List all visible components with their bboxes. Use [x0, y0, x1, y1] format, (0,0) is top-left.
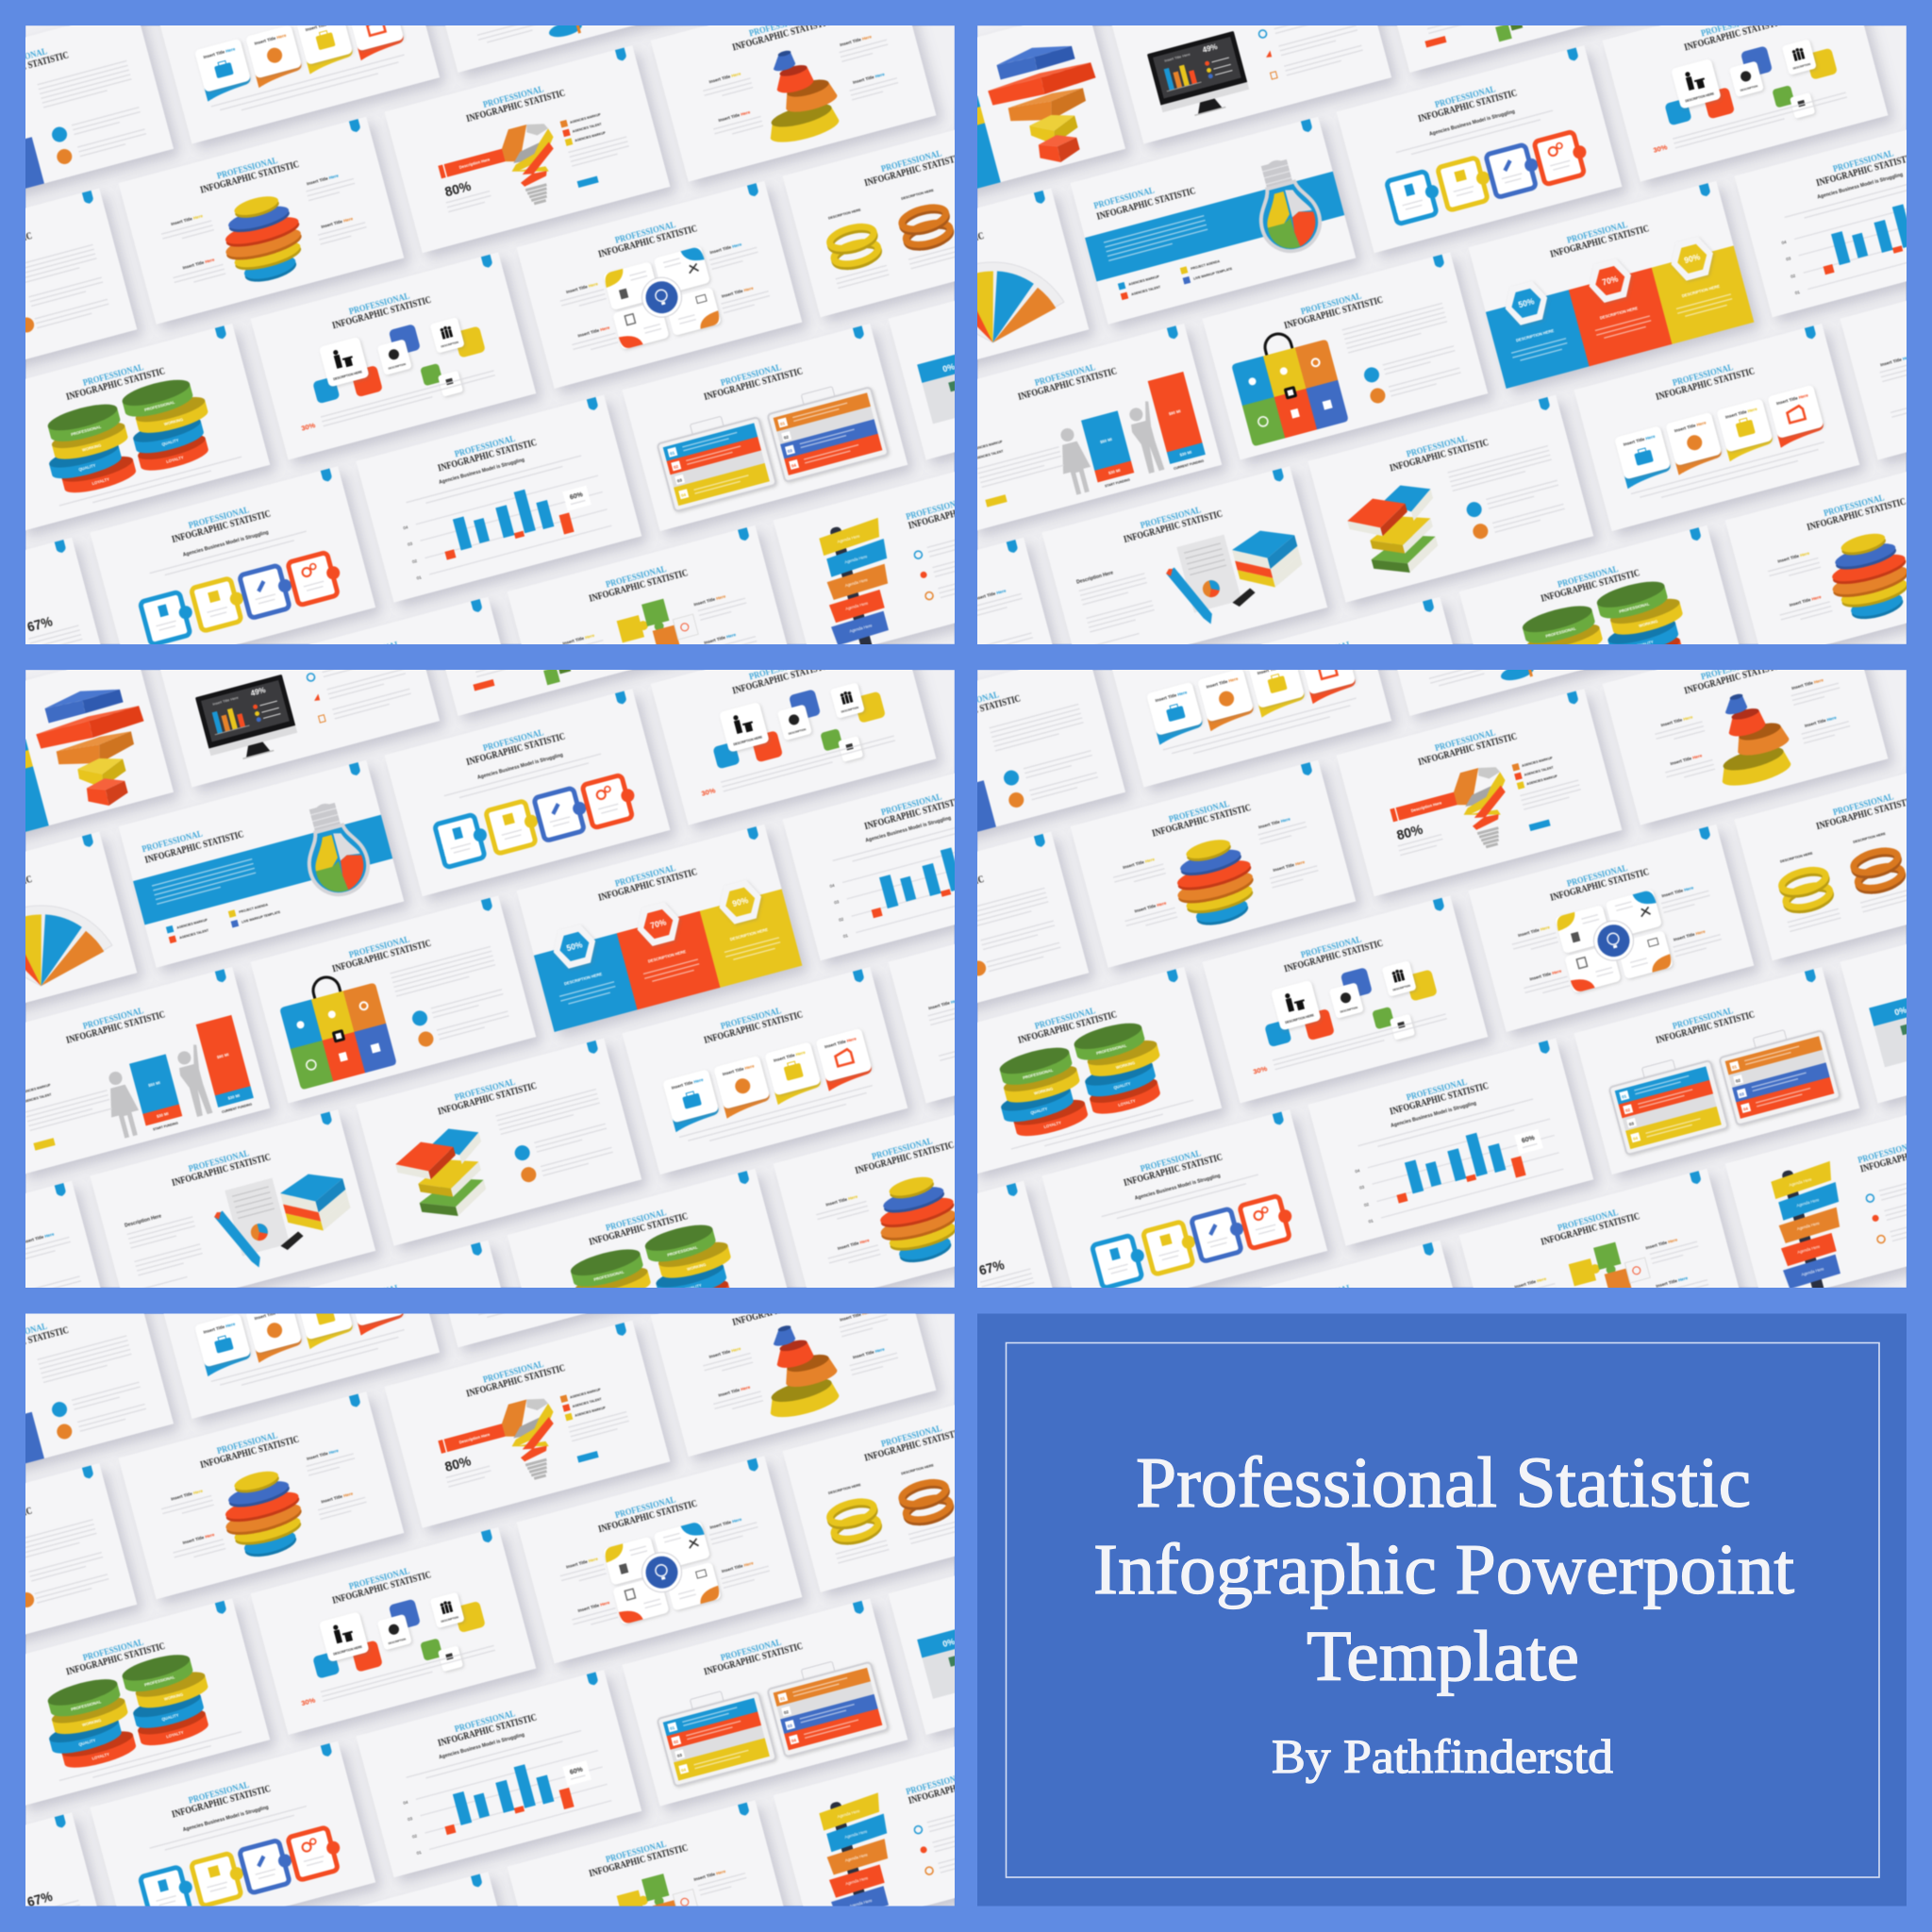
slide: stacked discs: INFOGRAPHIC STATISTIC — [199, 159, 300, 196]
chart gridlines and axis labels — [403, 474, 612, 580]
slide: suitcase panels — [622, 324, 908, 531]
slide: puzzle: Insert Title Here — [704, 632, 737, 645]
slide: document, book and pen: INFOGRAPHIC STATISTIC — [1123, 509, 1224, 545]
hexagon 90 percent — [1666, 234, 1718, 283]
slide: light bulb hub with four cards — [517, 181, 802, 389]
slide: colored bag: INFOGRAPHIC STATISTIC — [1283, 295, 1384, 331]
slide: book stack: INFOGRAPHIC STATISTIC — [1389, 438, 1490, 475]
hub center with bulb icon — [638, 273, 686, 322]
slide: 3D rings: DESCRIPTION HERE — [828, 208, 862, 221]
slide: people with bars: PROFESSIONAL — [1034, 363, 1096, 389]
step 3 — [240, 563, 297, 619]
slide: three hexagon columns: PROFESSIONAL — [1566, 221, 1628, 246]
chart bars — [435, 480, 575, 565]
slide: text column — [0, 189, 137, 396]
slide: bar chart (repeat) — [1735, 109, 1932, 317]
signpost pole and signs — [807, 516, 910, 658]
title: Infographic Powerpoint — [1093, 1530, 1794, 1609]
book stack — [1229, 523, 1307, 595]
slide: four agenda cards — [154, 0, 440, 144]
slide: three hexagon columns — [1469, 181, 1754, 389]
slide: document, book and pen: PROFESSIONAL — [1140, 506, 1202, 531]
slide: blue band with puzzle bulb: PROJECT AGENDA — [1191, 259, 1221, 271]
slide: light bulb hub with four cards: PROFESSIONAL — [614, 221, 676, 246]
bars: CURRENT FUNDING — [1174, 459, 1205, 471]
slide: monitor with small chart — [1106, 0, 1391, 144]
panel: slide mosaic B repeated, middle left — [0, 417, 1217, 1548]
slide: process steps (repeat) — [1337, 45, 1622, 253]
monitor: Insert Title Here — [1164, 51, 1191, 63]
bars: $30 MI — [1179, 450, 1192, 458]
card 4 — [347, 0, 407, 60]
slide: blue band with puzzle bulb — [1071, 117, 1356, 325]
slide: three hexagon columns: DESCRIPTION HERE — [1515, 328, 1555, 342]
card 2 — [245, 25, 305, 88]
slide: puzzle: Insert Title Here — [693, 593, 726, 607]
step 1 — [140, 590, 198, 645]
slide: people with bars: AGENCIES TALENT — [974, 449, 1005, 460]
slide: four cards (repeat) — [1574, 324, 1859, 531]
slide: colored bag — [1202, 252, 1488, 460]
slide: fan chart — [804, 189, 1089, 396]
slide: 3D rings: DESCRIPTION HERE — [901, 189, 935, 201]
slide: light bulb ribbon with 80 percent: AGENCIES MARKUP — [570, 112, 602, 125]
left cylinder stack: LOYALTY — [92, 476, 110, 486]
stapler — [1230, 587, 1257, 608]
funnel — [980, 34, 1114, 175]
callout 60 percent: 60% — [569, 490, 584, 501]
slide: top only visible — [241, 597, 525, 805]
slide: three hexagon columns: DESCRIPTION HERE — [1681, 284, 1721, 298]
slide: stacked cylinders: PROFESSIONAL — [82, 363, 144, 389]
card 3: Insert Title Here — [305, 19, 338, 32]
icon cards — [319, 310, 476, 425]
slide: stacked cones: PROFESSIONAL — [748, 14, 811, 39]
slide: book stack: PROFESSIONAL — [1406, 435, 1468, 459]
slide: blue band with puzzle bulb: AGENCIES MARKUP — [1128, 275, 1160, 287]
figure: man — [1125, 401, 1166, 475]
slide: light bulb hub with four cards: INFOGRAPHIC STATISTIC — [597, 224, 698, 260]
slide: floating squares with 30 percent: DESCRIPTION — [388, 362, 407, 371]
puzzle pieces — [614, 592, 700, 661]
bars — [1075, 372, 1208, 491]
slide: stacked discs: Insert Title Here — [182, 258, 215, 270]
orange rings — [899, 204, 953, 252]
slide: bar chart with 60 percent: INFOGRAPHIC STATISTIC — [437, 438, 538, 475]
yellow rings — [827, 223, 881, 271]
slide: partial text right: Insert Title Here — [1880, 354, 1913, 367]
card 3 — [296, 11, 356, 75]
slide: text with numbered bullets — [0, 8, 174, 215]
slide: stacked cones: INFOGRAPHIC STATISTIC — [731, 17, 832, 54]
slide: partial button slide — [1372, 0, 1657, 73]
chart gridlines and axis labels: 04 — [403, 525, 409, 530]
slide: signpost: PROFESSIONAL — [906, 497, 968, 523]
slide: blue band with puzzle bulb: LIVE MARKUP TEMPLATE — [1193, 267, 1233, 281]
title — [1093, 1443, 1794, 1696]
slide: blue band with puzzle bulb: AGENCIES TALENT — [1131, 285, 1161, 296]
title: Professional Statistic — [1136, 1443, 1751, 1523]
slide: four process steps — [90, 466, 375, 674]
slide: light bulb ribbon with 80 percent: INFOGRAPHIC STATISTIC — [465, 89, 566, 125]
slide: 3D rings: PROFESSIONAL — [880, 149, 943, 175]
slide: stacked cones: Insert Title Here — [840, 34, 873, 47]
slide: stacked discs: Insert Title Here — [307, 173, 340, 186]
step 4 — [288, 550, 345, 606]
slide: suitcase panels: INFOGRAPHIC STATISTIC — [703, 366, 804, 403]
slide: light bulb hub with four cards: Insert Title Here — [577, 325, 610, 338]
slide: stacked cones: Insert Title Here — [852, 72, 886, 85]
hub cards — [601, 246, 722, 350]
slide: top only visible: PROFESSIONAL — [339, 641, 402, 665]
slide: partial blue card: 0% — [941, 361, 956, 375]
left cylinder stack: QUALITY — [78, 463, 96, 472]
step 2 — [191, 576, 249, 631]
right cylinder stack: QUALITY — [161, 438, 179, 447]
left case — [655, 407, 776, 511]
slide: floating squares with 30 percent: PROFESSIONAL — [348, 292, 410, 317]
slide: 3D rings: INFOGRAPHIC STATISTIC — [863, 153, 964, 189]
slide: partial text — [775, 538, 1061, 745]
slide: document, book and pen: Description Here — [1076, 570, 1114, 586]
card 4: Insert Title Here — [356, 6, 390, 19]
slide: light bulb ribbon with 80 percent: 80% — [443, 178, 473, 201]
slide: puzzle: INFOGRAPHIC STATISTIC — [588, 568, 689, 605]
hexagon 50 percent: 50% — [1517, 296, 1535, 309]
right cylinder stack — [120, 372, 220, 475]
slide: blue band with puzzle bulb: PROFESSIONAL — [1093, 187, 1156, 211]
slide: stacked cylinders (repeat) — [1459, 525, 1745, 733]
slide: stacked cones — [651, 0, 936, 182]
panel: title card — [977, 1313, 1907, 1906]
slide: 67 percent: 67% — [25, 613, 55, 636]
slide: stacked discs: Insert Title Here — [171, 213, 204, 226]
chart gridlines and axis labels: 03 — [408, 541, 413, 547]
slide: floating squares with 30 percent: DESCRIPTION HERE — [333, 370, 362, 381]
slide: stacked cylinders: INFOGRAPHIC STATISTIC — [65, 366, 166, 403]
bulb ribbons — [497, 119, 569, 208]
slide: document, book and pen — [1041, 466, 1327, 674]
slide: bar chart with 60 percent — [356, 395, 641, 603]
bag — [1226, 322, 1349, 446]
slide: signpost: INFOGRAPHIC STATISTIC — [908, 495, 1008, 532]
left case: 04 — [680, 492, 687, 498]
right cylinder stack: WORKING — [163, 417, 184, 426]
slide: bar chart with 60 percent: PROFESSIONAL — [454, 435, 516, 459]
card 1 — [194, 39, 254, 102]
panel: slide mosaic B, top right — [647, 0, 1932, 905]
slide: light bulb hub with four cards: Insert Title Here — [709, 242, 742, 255]
slide: people with bars — [936, 324, 1222, 531]
panel: slide mosaic A repeated, bottom left — [0, 1049, 1218, 1932]
left case: 02 — [673, 464, 679, 470]
bars: START FUNDING — [1105, 477, 1131, 489]
signpost pole and signs: Agenda Here — [844, 577, 869, 588]
slide: book stack — [1307, 395, 1593, 603]
bars: $30 MI — [1108, 468, 1121, 475]
signpost pole and signs: Agenda Here — [844, 554, 869, 564]
slide: light bulb ribbon with 80 percent: PROFESSIONAL — [482, 85, 545, 110]
slide: stacked discs: PROFESSIONAL — [216, 157, 278, 182]
slide: floating squares with 30 percent — [250, 252, 536, 460]
left cylinder stack: WORKING — [81, 442, 102, 453]
ribbon bar — [438, 149, 506, 178]
slide: stacked cones: Insert Title Here — [718, 109, 751, 123]
slide: stacked discs (repeat) — [1725, 454, 1932, 661]
hexagon 50 percent — [1500, 278, 1553, 328]
puzzle light bulb — [1246, 153, 1326, 258]
slide: three hexagon columns: INFOGRAPHIC STATISTIC — [1549, 224, 1650, 260]
title frame — [1006, 1343, 1879, 1877]
slide: stacked discs — [119, 117, 404, 325]
right case — [765, 377, 889, 482]
slide: floating squares with 30 percent: 30% — [301, 423, 317, 433]
slide: blue band with puzzle bulb: INFOGRAPHIC STATISTIC — [1095, 186, 1197, 223]
slide: light bulb hub with four cards: Insert Title Here — [721, 286, 755, 299]
right case: 02 — [783, 434, 790, 441]
right case: 03 — [787, 448, 793, 454]
slide: people with bars: AGENCIES MARKUP — [972, 440, 1004, 452]
panel: slide mosaic A repeated, middle right — [647, 417, 1932, 1552]
slide: signpost — [774, 454, 1060, 665]
signpost pole and signs: Agenda Here — [837, 533, 861, 544]
callout 60 percent — [562, 486, 591, 511]
monitor: 49% — [1202, 42, 1219, 55]
hexagon 90 percent: 90% — [1683, 252, 1701, 265]
slide: partially visible slide — [420, 0, 706, 73]
books — [1342, 478, 1450, 585]
chart gridlines and axis labels: 01 — [416, 575, 423, 580]
slide: suitcase panels: PROFESSIONAL — [720, 363, 782, 389]
slide: four process steps: Agencies Business Model is Struggling — [182, 530, 269, 558]
left cylinder stack — [38, 398, 139, 500]
slide: puzzle: PROFESSIONAL — [605, 565, 668, 591]
slide: three hexagon columns: DESCRIPTION HERE — [1599, 306, 1639, 321]
slide: partial text: Insert Title Here — [974, 588, 1007, 601]
slide: partial text right — [1840, 252, 1932, 460]
right case: 04 — [791, 462, 797, 469]
document with pie — [1176, 535, 1241, 613]
title: Template — [1307, 1617, 1579, 1696]
slide: fan chart: INFOGRAPHIC STATISTIC — [884, 231, 985, 268]
slide: stacked cones: Insert Title Here — [708, 71, 741, 84]
slide: four process steps: PROFESSIONAL — [188, 506, 250, 531]
slide: bar chart with 60 percent: Agencies Business Model is Struggling — [439, 458, 525, 486]
slide: floating squares (repeat) — [1603, 0, 1888, 182]
slide: stacked discs: Insert Title Here — [321, 216, 354, 229]
slide: top only visible — [1192, 597, 1477, 805]
slide: light bulb ribbon with 80 percent — [385, 45, 670, 253]
right case: 01 — [779, 421, 786, 426]
fan sectors — [915, 244, 1070, 358]
slide: 3D funnel blocks — [840, 8, 1125, 215]
right cylinder stack: LOYALTY — [166, 455, 184, 464]
slide: partial blue card — [889, 252, 1174, 460]
monitor — [1147, 31, 1252, 124]
pen — [1165, 561, 1214, 632]
signpost pole and signs: Agenda Here — [845, 601, 869, 611]
slide: light bulb ribbon with 80 percent: AGENCIES TALENT — [572, 122, 603, 134]
disc stack — [214, 189, 311, 290]
bars: $50 MI — [1100, 437, 1112, 444]
slide: floating squares with 30 percent: DESCRIPTION — [441, 341, 458, 348]
card 2: Insert Title Here — [254, 33, 287, 46]
slide: stacked cylinders — [0, 324, 270, 531]
ribbon bar: Description Here — [458, 157, 491, 170]
chart gridlines and axis labels: 02 — [411, 558, 418, 564]
card 1: Insert Title Here — [203, 46, 236, 59]
slide: 3D rings — [783, 109, 1068, 317]
slide: 67 percent — [0, 538, 109, 745]
hexagon 70 percent — [1584, 256, 1636, 306]
slide: light bulb hub with four cards: Insert Title Here — [566, 281, 599, 294]
slide: light bulb ribbon with 80 percent: AGENCIES MARKUP — [575, 131, 607, 142]
slide: puzzle: Insert Title Here — [562, 633, 595, 646]
bars: $90 MI — [1168, 408, 1181, 416]
slide: top only visible: PROFESSIONAL — [1291, 641, 1354, 665]
panel: slide mosaic A, top left — [25, 25, 955, 644]
signpost pole and signs: Agenda Here — [849, 623, 874, 634]
cone stack — [750, 41, 846, 147]
left cylinder stack: PROFESSIONAL — [71, 425, 102, 437]
slide: floating squares with 30 percent: INFOGRAPHIC STATISTIC — [331, 295, 432, 331]
left case: 01 — [670, 450, 675, 456]
hexagon 70 percent: 70% — [1601, 275, 1619, 288]
figure: woman — [1052, 425, 1097, 497]
slide: colored bag: PROFESSIONAL — [1300, 292, 1362, 317]
slide: four process steps: INFOGRAPHIC STATISTIC — [171, 509, 272, 545]
slide: people with bars: INFOGRAPHIC STATISTIC — [1017, 366, 1118, 403]
right cylinder stack: PROFESSIONAL — [144, 400, 175, 412]
slide: puzzle — [508, 525, 793, 733]
slide: fan chart: PROFESSIONAL — [901, 228, 963, 253]
left case: 03 — [676, 477, 683, 483]
byline: By Pathfinderstd — [1272, 1731, 1613, 1784]
